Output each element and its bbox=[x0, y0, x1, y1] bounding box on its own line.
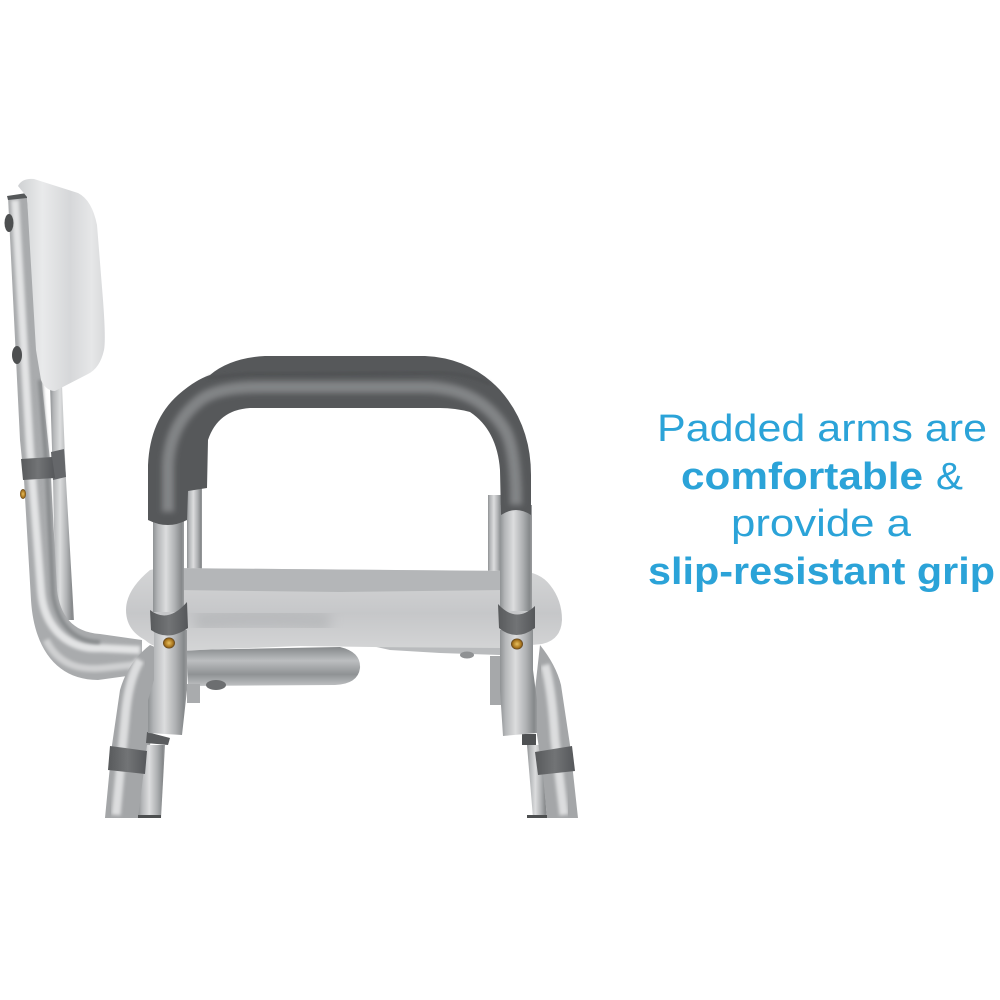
main tube grey band bbox=[21, 457, 55, 480]
left leg collar bbox=[146, 732, 170, 745]
seat front shadow bbox=[195, 619, 330, 622]
left bracket bbox=[148, 630, 187, 735]
rear tube grey band bbox=[51, 449, 66, 480]
tube shadow bbox=[40, 380, 100, 642]
right gold screw bbox=[511, 638, 523, 650]
backrest tube with bend bbox=[8, 197, 142, 680]
left leg highlight bbox=[116, 660, 140, 815]
shower chair product photo bbox=[4, 179, 578, 818]
rear arm support bbox=[187, 488, 202, 572]
right arm support tube bbox=[500, 505, 532, 611]
right leg collar bbox=[522, 734, 536, 745]
left leg band bbox=[108, 746, 147, 774]
left arm support tube bbox=[153, 520, 184, 612]
rear bracket tabs bbox=[187, 656, 501, 705]
line: comfortable &: comfortable bbox=[681, 456, 923, 498]
seat body bbox=[126, 568, 562, 651]
padded arm bbox=[148, 356, 531, 525]
rear backrest tube bbox=[50, 385, 74, 620]
left collar band bbox=[150, 602, 188, 636]
under-seat handle bbox=[186, 647, 360, 686]
arm silhouette bbox=[148, 356, 531, 525]
tube lower highlight bbox=[46, 640, 142, 669]
backrest pad bbox=[18, 179, 105, 391]
left outer leg bbox=[105, 645, 162, 818]
caption text bbox=[648, 408, 995, 593]
arm ridge line bbox=[208, 373, 490, 384]
gold screw on backrest tube bbox=[20, 489, 26, 499]
right leg highlight bbox=[545, 665, 564, 815]
backrest tube top cap bbox=[7, 193, 27, 200]
seat top surface bbox=[162, 568, 505, 592]
line: slip-resistant grip: slip-resistant grip bbox=[648, 551, 995, 593]
right outer leg bbox=[535, 645, 578, 818]
right leg band bbox=[535, 746, 575, 775]
line: comfortable &: & bbox=[936, 456, 963, 498]
seat bbox=[126, 568, 562, 651]
line: Padded arms are: Padded arms are bbox=[657, 408, 987, 450]
seat underside bbox=[372, 646, 500, 655]
left inner leg bbox=[138, 745, 165, 818]
arm soft highlight bbox=[168, 387, 516, 512]
backrest bolts bbox=[4, 214, 22, 364]
line: provide a: provide a bbox=[731, 503, 912, 545]
handle bolt bbox=[206, 680, 226, 690]
left gold screw bbox=[163, 638, 175, 648]
right side bolt bbox=[460, 652, 474, 658]
tube highlight bbox=[15, 200, 140, 650]
foot edges bbox=[138, 815, 547, 818]
right bracket bbox=[500, 630, 537, 736]
right inner leg bbox=[527, 745, 547, 818]
right collar band bbox=[498, 604, 535, 635]
